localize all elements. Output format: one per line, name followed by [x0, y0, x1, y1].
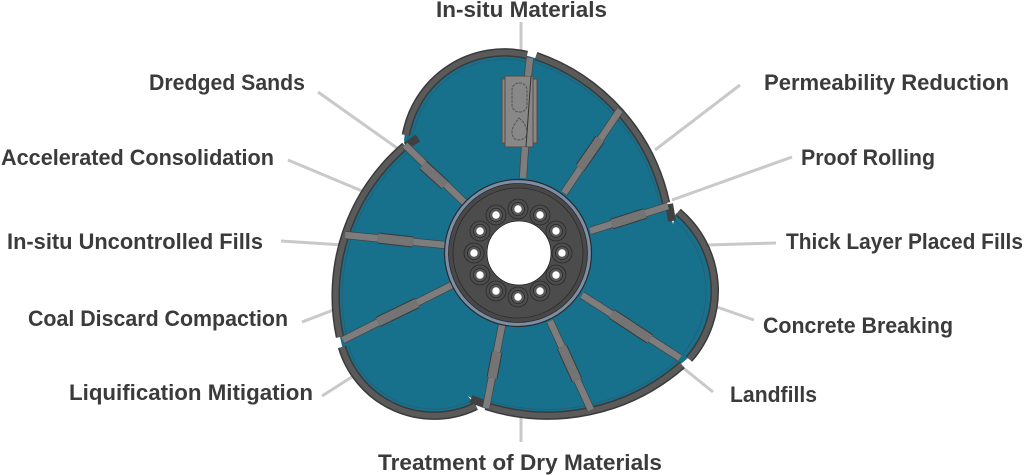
centre hole — [487, 221, 551, 285]
leader lines — [281, 22, 792, 442]
label: Liquification Mitigation: Liquification Mitigation — [69, 380, 313, 405]
outer wall segments — [336, 52, 715, 416]
teal segment fill — [336, 53, 712, 416]
access hatch — [502, 76, 537, 147]
segmented drum body — [336, 52, 715, 416]
label: Concrete Breaking: Concrete Breaking — [763, 313, 953, 338]
thin inner liner — [336, 53, 713, 416]
label: Dredged Sands: Dredged Sands — [149, 70, 305, 95]
label: Proof Rolling: Proof Rolling — [801, 145, 935, 170]
label: Permeability Reduction: Permeability Reduction — [764, 70, 1009, 95]
label: Landfills: Landfills — [730, 382, 817, 407]
notch stubs — [406, 138, 672, 405]
radial spokes — [343, 58, 680, 410]
bolt ring — [464, 199, 572, 307]
label: Treatment of Dry Materials: Treatment of Dry Materials — [378, 450, 662, 475]
label: Accelerated Consolidation: Accelerated Consolidation — [1, 145, 274, 170]
label: Coal Discard Compaction: Coal Discard Compaction — [28, 306, 288, 331]
label: In-situ Uncontrolled Fills: In-situ Uncontrolled Fills — [7, 229, 263, 254]
central hub — [444, 180, 592, 326]
